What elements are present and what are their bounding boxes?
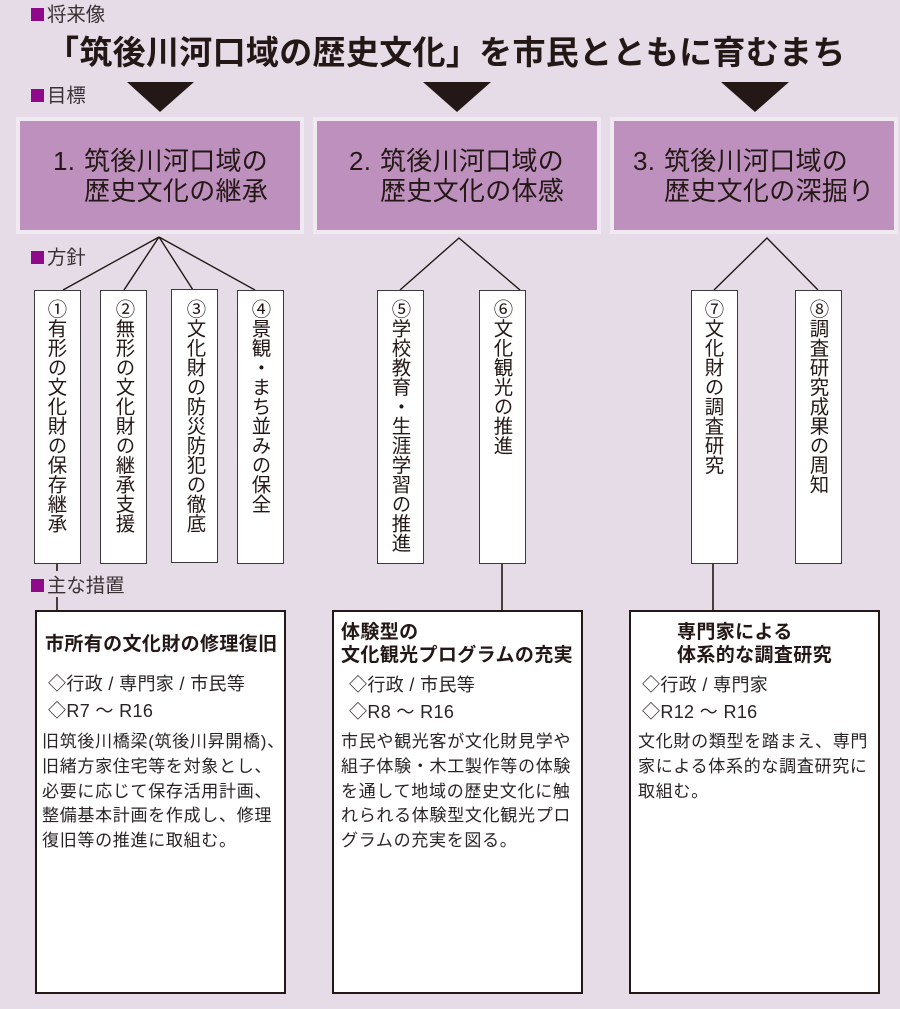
policy 5: ⑤学校教育・生涯学習の推進 bbox=[388, 299, 410, 552]
measure 1: 整備基本計画を作成し、修理 bbox=[42, 806, 272, 825]
policy 5 bbox=[377, 290, 424, 564]
goal 2: 筑後川河口域の bbox=[380, 146, 564, 176]
goal 1 bbox=[16, 117, 304, 234]
policy 4: ④景観・まち並みの保全 bbox=[248, 299, 270, 514]
label: 主な措置: 主な措置 bbox=[47, 575, 125, 597]
measure 3: ◇行政 / 専門家 bbox=[642, 675, 768, 695]
goal 1: 歴史文化の継承 bbox=[84, 176, 268, 206]
policy 3: ③文化財の防災防犯の徹底 bbox=[183, 299, 205, 533]
measure 2: ◇R8 ～ R16 bbox=[349, 702, 454, 722]
measure 1: 旧緒方家住宅等を対象とし、 bbox=[42, 757, 272, 776]
measure 1: 旧筑後川橋梁(筑後川昇開橋)、 bbox=[42, 732, 285, 751]
measure 3: 家による体系的な調査研究に bbox=[638, 757, 868, 776]
goal 2: 歴史文化の体感 bbox=[380, 176, 564, 206]
measure 1: 必要に応じて保存活用計画、 bbox=[42, 782, 272, 801]
policy 8: ⑧調査研究成果の周知 bbox=[806, 299, 828, 494]
measure 2: 市民や観光客が文化財見学や bbox=[341, 732, 571, 751]
measure 2: 体験型の bbox=[341, 622, 419, 643]
policy 3 bbox=[171, 289, 218, 563]
label: 将来像: 将来像 bbox=[47, 4, 105, 26]
goal 3: 歴史文化の深掘り bbox=[664, 176, 874, 206]
goal 2 bbox=[313, 117, 601, 234]
policy 6 bbox=[479, 290, 526, 564]
measure 2: 文化観光プログラムの充実 bbox=[341, 645, 573, 666]
measure 1: ◇R7 ～ R16 bbox=[48, 701, 153, 721]
measure 2: れられる体験型文化観光プロ bbox=[341, 806, 571, 825]
policy 7 bbox=[691, 290, 738, 564]
label: 目標: 目標 bbox=[47, 85, 86, 107]
policy 4 bbox=[237, 290, 284, 564]
title: 「筑後川河口域の歴史文化」を市民とともに育むまち bbox=[46, 34, 846, 71]
goal 1: 1. bbox=[53, 146, 75, 176]
measure 2: を通して地域の歴史文化に触 bbox=[341, 782, 571, 801]
measure 1: 復旧等の推進に取組む。 bbox=[42, 831, 237, 850]
measure 2: 組子体験・木工製作等の体験 bbox=[341, 757, 571, 776]
goal 3: 3. bbox=[633, 146, 655, 176]
measure 1 bbox=[35, 610, 286, 994]
measure 2: ◇行政 / 市民等 bbox=[349, 675, 475, 695]
measure 1: 市所有の文化財の修理復旧 bbox=[45, 634, 278, 655]
goal 3: 筑後川河口域の bbox=[664, 146, 848, 176]
policy 6: ⑥文化観光の推進 bbox=[490, 299, 512, 455]
measure 1: ◇行政 / 専門家 / 市民等 bbox=[48, 674, 245, 694]
policy 1: ①有形の文化財の保存継承 bbox=[44, 299, 66, 533]
policy 2: ②無形の文化財の継承支援 bbox=[112, 299, 134, 533]
label: 方針: 方針 bbox=[47, 247, 86, 269]
policy 2 bbox=[100, 290, 147, 564]
policy 8 bbox=[795, 290, 842, 564]
policy 7: ⑦文化財の調査研究 bbox=[701, 299, 723, 474]
goal 1: 筑後川河口域の bbox=[84, 146, 268, 176]
measure 2 bbox=[332, 610, 583, 994]
goal 2: 2. bbox=[349, 146, 371, 176]
measure 3: 体系的な調査研究 bbox=[677, 645, 832, 666]
measure 3: 文化財の類型を踏まえ、専門 bbox=[638, 732, 868, 751]
measure 3: ◇R12 ～ R16 bbox=[642, 702, 758, 722]
measure 3: 取組む。 bbox=[638, 782, 709, 801]
goal 3 bbox=[610, 117, 898, 234]
measure 2: グラムの充実を図る。 bbox=[341, 831, 518, 850]
policy 1 bbox=[34, 290, 81, 564]
measure 3: 専門家による bbox=[677, 622, 793, 643]
measure 3 bbox=[629, 610, 880, 994]
